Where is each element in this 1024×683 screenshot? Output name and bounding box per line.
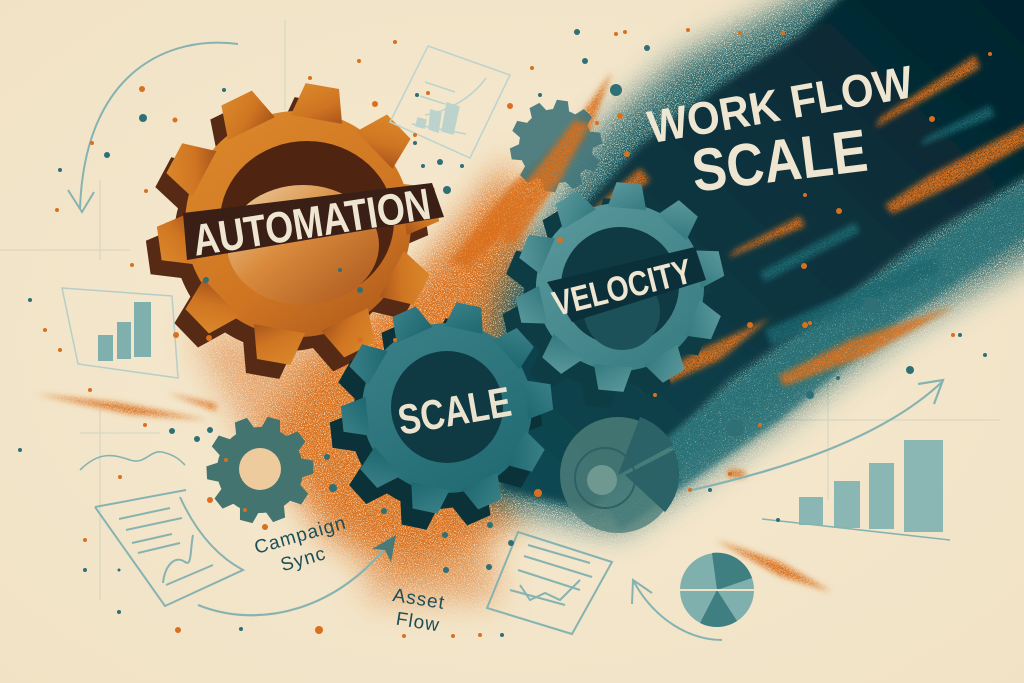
annotation: Campaign Sync: Sync <box>278 543 329 576</box>
title <box>644 55 917 205</box>
gear depth shadow <box>124 75 450 401</box>
label: Velocity: VELOCITY <box>549 252 696 324</box>
gear hole <box>561 227 679 345</box>
gear: Velocity <box>493 174 734 416</box>
bar chart right <box>762 440 950 540</box>
label: Automation: AUTOMATION <box>189 180 434 266</box>
pie chart dark <box>560 417 679 533</box>
gear face <box>321 283 573 533</box>
gear: Automation <box>124 61 461 401</box>
arrow: top left curved <box>68 43 238 212</box>
dark teal brush streak <box>470 0 1024 530</box>
gear face <box>135 61 461 387</box>
arrow bottom right curved <box>632 580 722 640</box>
document sketch bottom left <box>95 490 243 606</box>
faint gear behind <box>504 94 608 198</box>
arrow: campaign sync to centre <box>198 535 396 615</box>
annotation: Asset Flow <box>391 585 446 636</box>
gear depth shadow <box>493 190 721 416</box>
gear: Scale <box>310 283 573 549</box>
label: Scale: SCALE <box>394 378 515 444</box>
title: SCALE <box>688 117 871 205</box>
bars <box>98 302 151 361</box>
chart sheet: left <box>62 288 178 378</box>
line sketch left <box>80 452 185 470</box>
annotation: Asset Flow: Flow <box>394 609 441 636</box>
title: WORK FLOW <box>644 55 917 153</box>
annotation: Campaign Sync: Campaign <box>252 513 349 559</box>
gear depth shadow <box>310 299 562 549</box>
pie chart small <box>680 553 754 627</box>
annotation: Asset Flow: Asset <box>391 585 446 614</box>
small gear icon <box>194 405 326 535</box>
orange spray burst <box>190 160 540 600</box>
teal streak highlights <box>760 105 995 346</box>
gear hole <box>220 141 394 301</box>
chart sheet: top centre <box>390 46 510 158</box>
gear face <box>506 174 734 400</box>
orange brush streaks <box>36 55 1024 592</box>
rising arrow right <box>692 380 943 490</box>
document sketch bottom centre <box>487 532 612 634</box>
gear hole <box>391 351 503 463</box>
